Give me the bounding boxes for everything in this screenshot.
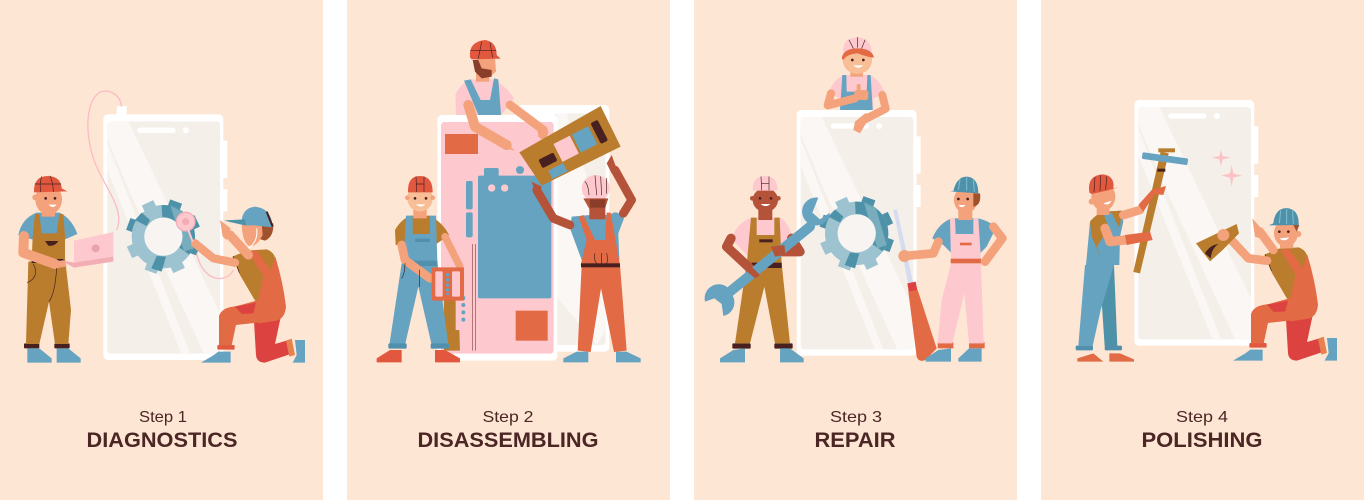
caption: step 1: DIAGNOSTICS (86, 429, 238, 452)
gear (819, 196, 894, 271)
caption: step 1: Step 1 (139, 409, 187, 426)
caption: step 4: Step 4 (1176, 409, 1228, 426)
standing worker with squeegee (1076, 148, 1188, 362)
caption: step 3 (814, 409, 896, 452)
caption: step 3: REPAIR (814, 429, 896, 452)
gear (126, 199, 201, 274)
illustration: step 3 (705, 37, 1002, 362)
right worker from behind (532, 155, 641, 362)
right worker in pink (898, 177, 1002, 362)
open phone with internals (437, 115, 557, 361)
top worker head and hand (842, 37, 886, 133)
worker on top with beard (455, 40, 549, 151)
panel: step 4 polishing (1041, 0, 1364, 500)
phone (797, 110, 921, 356)
illustration: step 1 (18, 91, 305, 363)
top worker thumbs up (828, 46, 885, 112)
cable (88, 91, 122, 230)
panel: step 3 repair (694, 0, 1017, 500)
caption: step 4 (1142, 409, 1262, 452)
circuit board (519, 106, 621, 186)
illustration: step 2 (377, 40, 641, 362)
caption: step 2: Step 2 (482, 409, 534, 426)
screwdriver (893, 209, 937, 361)
phone (103, 106, 227, 360)
illustration: step 4 (1076, 100, 1337, 362)
kneeling worker with stethoscope (176, 207, 305, 363)
caption: step 3: Step 3 (830, 409, 882, 426)
worker with laptop (18, 176, 113, 363)
caption: step 2 (418, 409, 598, 452)
sparkles (1212, 150, 1242, 187)
back phone (517, 105, 609, 352)
panel: step 2 disassembling (347, 0, 670, 500)
phone (1134, 100, 1258, 346)
left worker with chip (377, 176, 464, 362)
left worker with wrench (705, 176, 830, 362)
caption: step 4: POLISHING (1142, 429, 1262, 452)
kneeling worker with rag (1196, 208, 1337, 361)
panel: step 1 diagnostics (0, 0, 323, 500)
caption: step 1 (86, 409, 238, 452)
caption: step 2: DISASSEMBLING (418, 429, 598, 452)
